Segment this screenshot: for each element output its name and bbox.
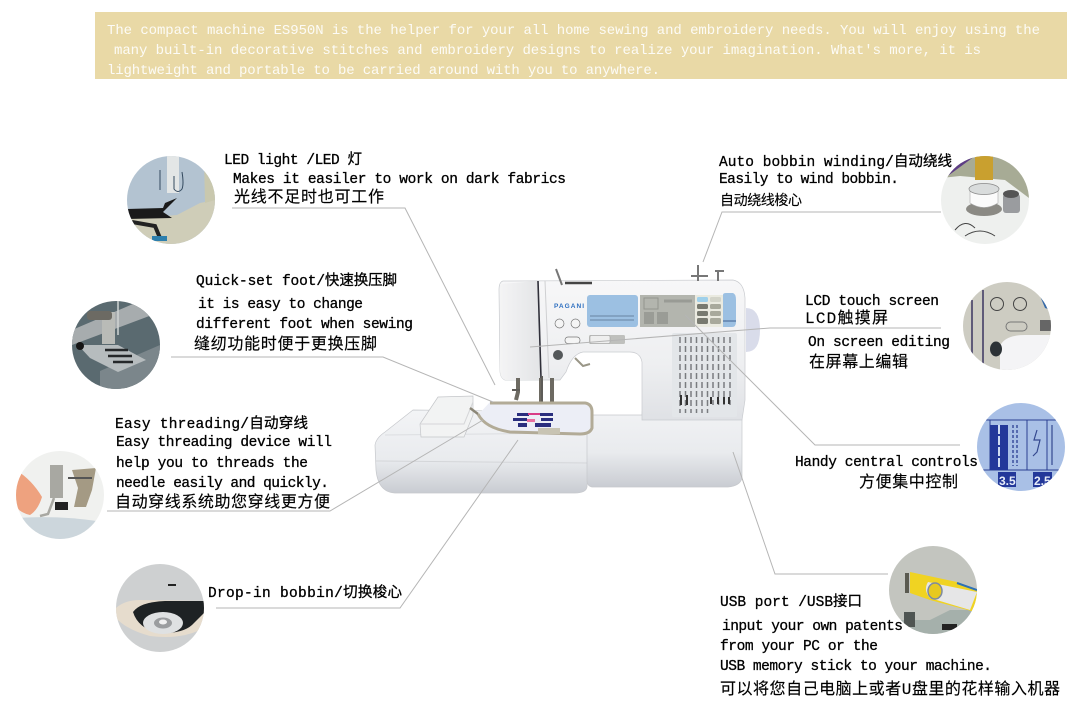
photo: LCD touch screen [963, 282, 1051, 370]
text: quick-set foot: it is easy to change [198, 297, 363, 313]
text: LCD touch screen: LCD touch screen [805, 294, 939, 310]
photo: easy threading [16, 451, 104, 539]
photo: handy central controls [977, 403, 1065, 491]
embroidery design [513, 413, 553, 427]
text: LCD touch screen: 在屏幕上编辑 [809, 353, 908, 372]
text: easy threading [115, 415, 332, 512]
photo: LED light [127, 156, 215, 244]
text: LCD touch screen: LCD触摸屏 [805, 309, 888, 328]
top spool pins [556, 265, 724, 285]
needle thread slot [538, 281, 541, 378]
intro banner: many built-in decorative stitches and embroidery designs to realize your imagination. What's more, it is [114, 43, 981, 59]
text: easy threading: help you to threads the [116, 456, 308, 472]
text: LCD touch screen: On screen editing [808, 335, 950, 351]
photo: auto bobbin winding [941, 156, 1029, 244]
text: handy central controls: 方便集中控制 [859, 473, 958, 492]
text: handy central controls: Handy central controls [795, 455, 978, 471]
intro banner [95, 12, 1067, 79]
text: easy threading: 自动穿线系统助您穿线更方便 [115, 493, 330, 512]
round buttons [555, 319, 564, 328]
photo: handy central controls: 2.5 [1034, 474, 1051, 488]
text: easy threading: Easy threading device will [116, 435, 332, 451]
intro banner: lightweight and portable to be carried around with you to anywhere. [107, 63, 660, 79]
embroidery module box [420, 396, 473, 437]
leader lines [107, 208, 960, 608]
text: LED light: Makes it easiler to work on dark fabrics [233, 172, 566, 188]
presser foot and needle [516, 378, 552, 402]
text: easy threading: needle easily and quickly. [116, 476, 329, 492]
text: easy threading: Easy threading/自动穿线 [115, 415, 308, 433]
text: USB port [720, 593, 1060, 699]
text: LCD touch screen [805, 294, 950, 372]
text: auto bobbin winding [719, 153, 952, 210]
text: USB port: input your own patents [722, 619, 903, 635]
handwheel [746, 308, 760, 352]
text: USB port: from your PC or the [720, 639, 878, 655]
text: handy central controls [795, 455, 978, 492]
embroidery unit base [375, 410, 590, 493]
text: LED light: LED light /LED 灯 [224, 151, 362, 169]
right blue strip [723, 293, 736, 327]
text: LED light [224, 151, 566, 207]
brand label PAGANI: PAGANI [554, 303, 584, 310]
photo: drop-in bobbin [116, 564, 204, 652]
text: auto bobbin winding: Easily to wind bobbin. [719, 172, 899, 188]
machine head and column [499, 280, 745, 420]
text: USB port: USB port /USB接口 [720, 593, 862, 611]
photo: handy central controls: 3.5 [999, 474, 1016, 488]
keypad [695, 295, 723, 327]
photo: USB port [889, 546, 977, 634]
text: USB port: 可以将您自己电脑上或者U盘里的花样输入机器 [720, 679, 1060, 699]
blue panel [587, 295, 638, 327]
text: quick-set foot: Quick-set foot/快速换压脚 [196, 272, 397, 290]
text: drop-in bobbin: Drop-in bobbin/切换梭心 [208, 583, 402, 602]
machine base [587, 400, 742, 487]
intro banner: The compact machine ES950N is the helper for your all home sewing and embroidery needs. You will enjoy using the [107, 23, 1040, 39]
LCD screen [640, 295, 695, 327]
speed slider [589, 335, 625, 344]
embroidery hoop [478, 402, 592, 433]
text: USB port: USB memory stick to your machine. [720, 659, 992, 675]
text: quick-set foot: different foot when sewing [196, 317, 413, 333]
text: quick-set foot [194, 272, 413, 354]
photo: quick-set foot [72, 301, 160, 389]
text: LED light: 光线不足时也可工作 [234, 188, 384, 207]
text: auto bobbin winding: Auto bobbin winding/自动绕线 [719, 153, 952, 171]
stitch chart [672, 333, 737, 417]
text: quick-set foot: 缝纫功能时便于更换压脚 [194, 335, 377, 354]
text: auto bobbin winding: 自动绕线梭心 [720, 192, 802, 210]
sewing machine illustration [375, 265, 760, 493]
